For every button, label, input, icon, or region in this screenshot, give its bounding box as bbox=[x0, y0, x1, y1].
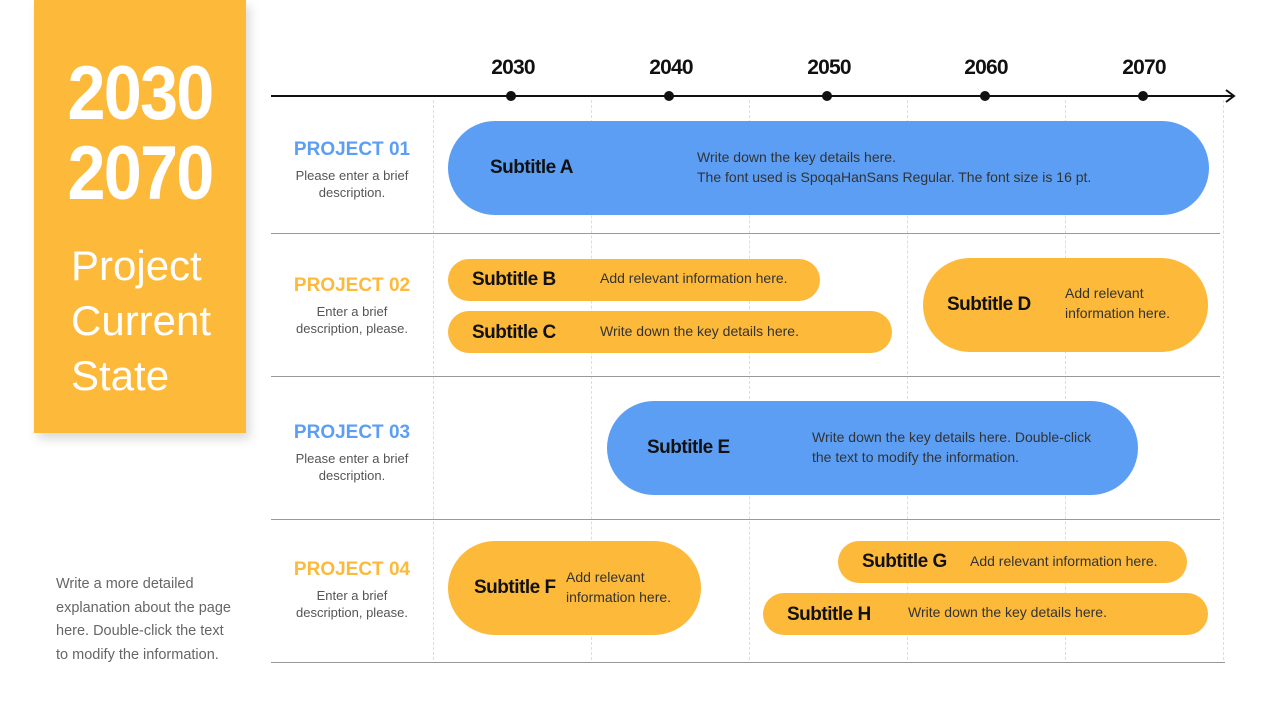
year labels bbox=[491, 56, 1166, 101]
project 04 label bbox=[294, 559, 410, 620]
bar A: Subtitle A bbox=[490, 157, 573, 178]
bar C bbox=[448, 311, 892, 353]
project 02 label: Enter a brief bbox=[317, 304, 387, 319]
bar H: Write down the key details here. bbox=[908, 604, 1107, 620]
bar E bbox=[607, 401, 1138, 495]
project 02 label bbox=[294, 275, 410, 336]
note text: to modify the information. bbox=[56, 646, 219, 662]
project 04 label: PROJECT 04 bbox=[294, 559, 410, 580]
bar F bbox=[448, 541, 701, 635]
title text: Project bbox=[71, 242, 202, 289]
bar C: Subtitle C bbox=[472, 322, 556, 343]
bar A bbox=[448, 121, 1209, 215]
bar E: Subtitle E bbox=[647, 437, 730, 458]
bar F: Add relevant bbox=[566, 569, 645, 585]
year labels: 2040 bbox=[649, 56, 693, 79]
note text: Write a more detailed bbox=[56, 576, 194, 592]
title text bbox=[71, 242, 211, 399]
bar E: Write down the key details here. Double-click bbox=[812, 429, 1091, 445]
bar G: Subtitle G bbox=[862, 551, 947, 572]
project 02 label: PROJECT 02 bbox=[294, 275, 410, 296]
project 01 label: PROJECT 01 bbox=[294, 139, 410, 160]
bar D: Subtitle D bbox=[947, 294, 1031, 315]
bar C: Write down the key details here. bbox=[600, 323, 799, 339]
year labels: 2050 bbox=[807, 56, 851, 79]
project 04 label: Enter a brief bbox=[317, 588, 387, 603]
bar F: information here. bbox=[566, 589, 671, 605]
project 03 label: description. bbox=[319, 468, 385, 483]
bar D bbox=[923, 258, 1208, 352]
year labels: 2070 bbox=[1122, 56, 1166, 79]
project 02 label: description, please. bbox=[296, 321, 408, 336]
title years bbox=[68, 51, 212, 216]
bar E: the text to modify the information. bbox=[812, 449, 1019, 465]
project 03 label bbox=[294, 422, 410, 483]
title text: Current bbox=[71, 297, 211, 344]
note text bbox=[56, 576, 231, 662]
project 04 label: description, please. bbox=[296, 605, 408, 620]
bar B bbox=[448, 259, 820, 301]
year labels: 2060 bbox=[964, 56, 1008, 79]
bar G: Add relevant information here. bbox=[970, 553, 1158, 569]
bar G bbox=[838, 541, 1187, 583]
title years: 2070 bbox=[68, 131, 212, 216]
bar A: Write down the key details here. bbox=[697, 149, 896, 165]
note text: explanation about the page bbox=[56, 600, 231, 616]
title years: 2030 bbox=[68, 51, 212, 136]
bar B: Subtitle B bbox=[472, 269, 556, 290]
year labels: 2030 bbox=[491, 56, 535, 79]
project 01 label bbox=[294, 139, 410, 200]
bar B: Add relevant information here. bbox=[600, 270, 788, 286]
note text: here. Double-click the text bbox=[56, 623, 224, 639]
project 01 label: description. bbox=[319, 185, 385, 200]
bar F: Subtitle F bbox=[474, 577, 556, 598]
bar H: Subtitle H bbox=[787, 604, 871, 625]
project 03 label: Please enter a brief bbox=[296, 451, 408, 466]
bar D: Add relevant bbox=[1065, 285, 1144, 301]
project 03 label: PROJECT 03 bbox=[294, 422, 410, 443]
timeline axis bbox=[271, 89, 1236, 103]
title text: State bbox=[71, 352, 169, 399]
yellow title panel bbox=[34, 0, 246, 433]
bar H bbox=[763, 593, 1208, 635]
bar D: information here. bbox=[1065, 305, 1170, 321]
project 01 label: Please enter a brief bbox=[296, 168, 408, 183]
bar A: The font used is SpoqaHanSans Regular. The font size is 16 pt. bbox=[697, 169, 1091, 185]
